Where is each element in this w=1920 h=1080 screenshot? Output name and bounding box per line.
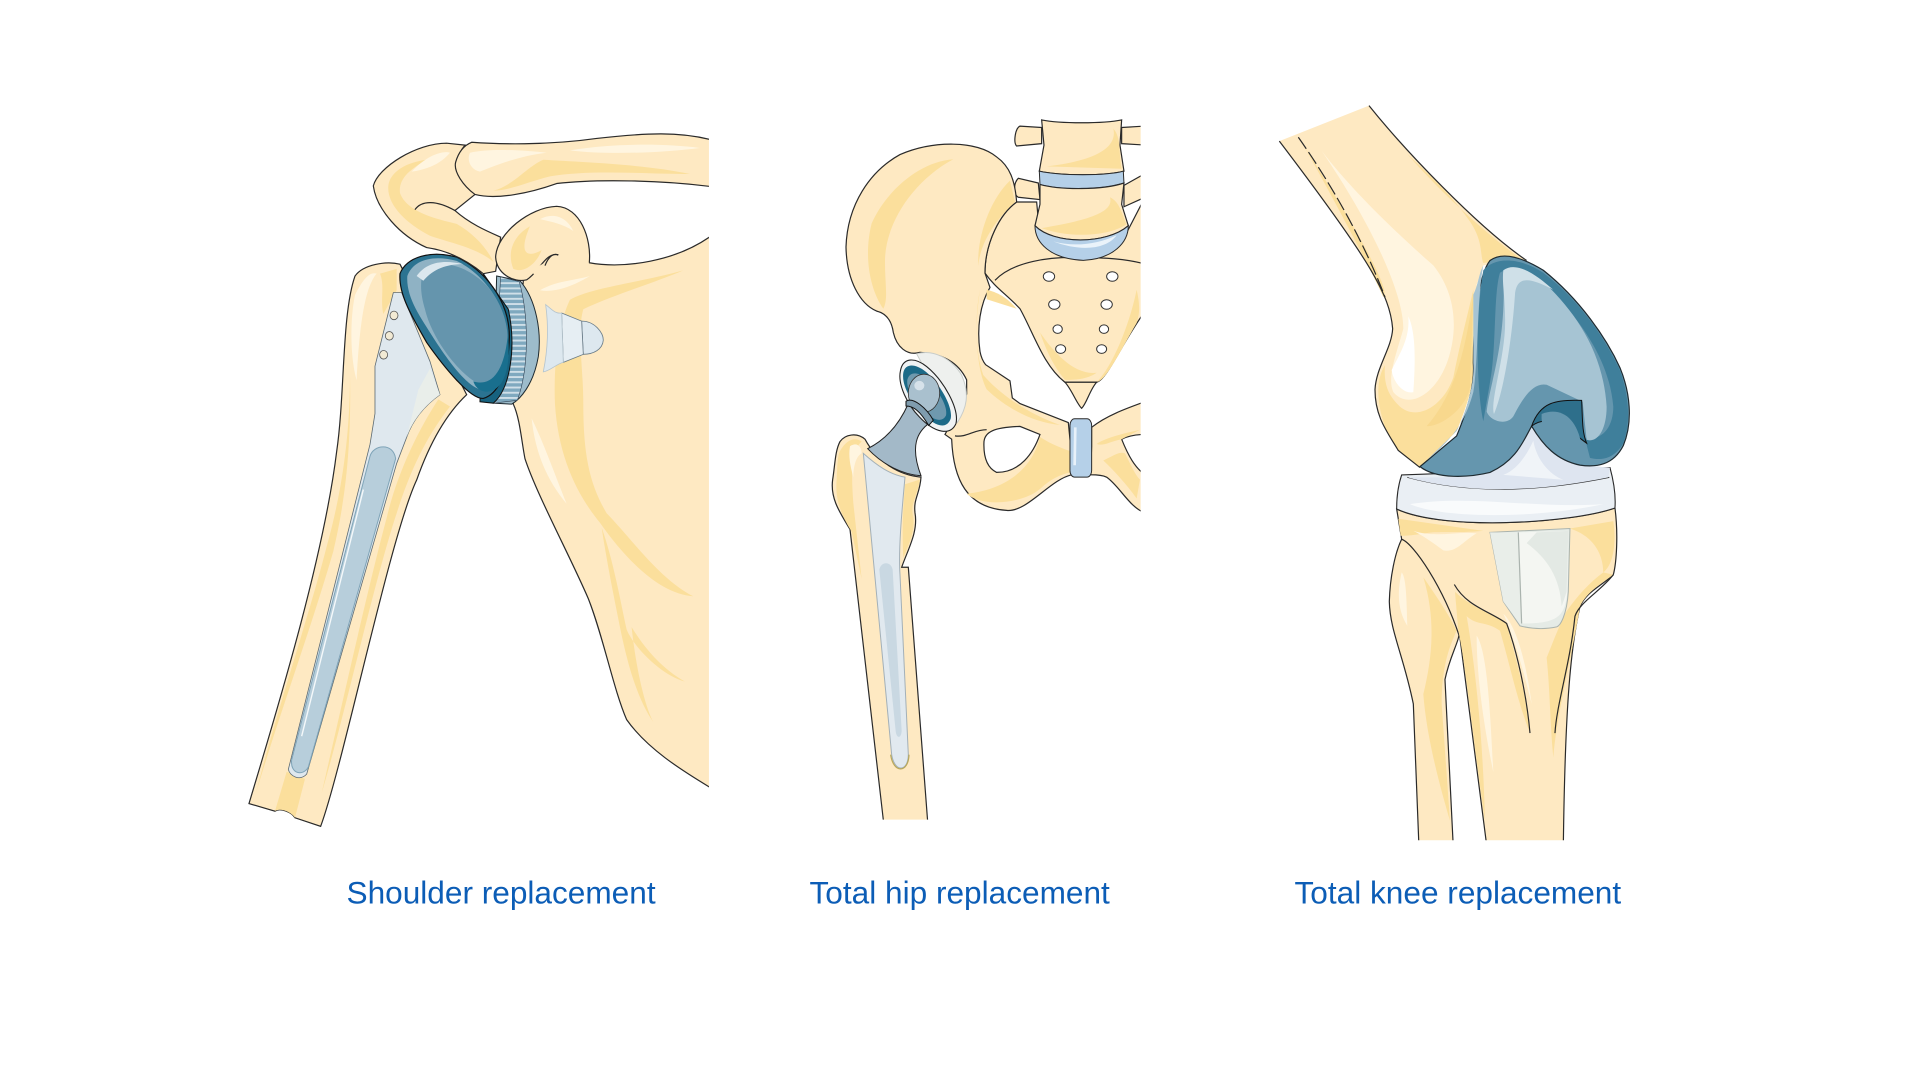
label: total knee replacement: Total knee replacement [1294, 874, 1621, 910]
humerus [249, 263, 467, 826]
illustration: shoulder replacement [249, 134, 713, 826]
illustration: total hip replacement [832, 120, 1145, 826]
acromion highlight [412, 152, 450, 172]
clavicle [455, 134, 713, 196]
pubic symphysis and right pubis [1070, 402, 1145, 513]
scapula [513, 234, 713, 789]
femoral component [1420, 256, 1629, 476]
label: shoulder replacement: Shoulder replacement [346, 874, 656, 910]
ribbed glenoid tray [493, 276, 539, 404]
glenoid peg [543, 305, 603, 372]
femur [832, 435, 928, 826]
acromion shading [388, 160, 493, 262]
acromion crease [415, 203, 455, 211]
hip bone [846, 144, 1072, 510]
label: total hip replacement: Total hip replacement [810, 874, 1110, 910]
tibial tray [1397, 426, 1615, 523]
humeral stem [288, 293, 440, 778]
femur [1279, 106, 1527, 468]
acetabular dome [917, 353, 966, 423]
acetabular cup and femoral ball [900, 360, 956, 431]
humeral head implant [400, 254, 512, 403]
sacrum [985, 197, 1145, 408]
coracoid process [496, 206, 590, 280]
tibial keel [1490, 528, 1570, 629]
femoral neck [868, 404, 930, 476]
illustration: total knee replacement [1279, 106, 1629, 848]
acromion [373, 143, 501, 274]
lumbar vertebrae and discs [1015, 120, 1145, 260]
fibula [1389, 539, 1459, 848]
tibia [1397, 508, 1617, 848]
femoral stem [863, 453, 909, 769]
